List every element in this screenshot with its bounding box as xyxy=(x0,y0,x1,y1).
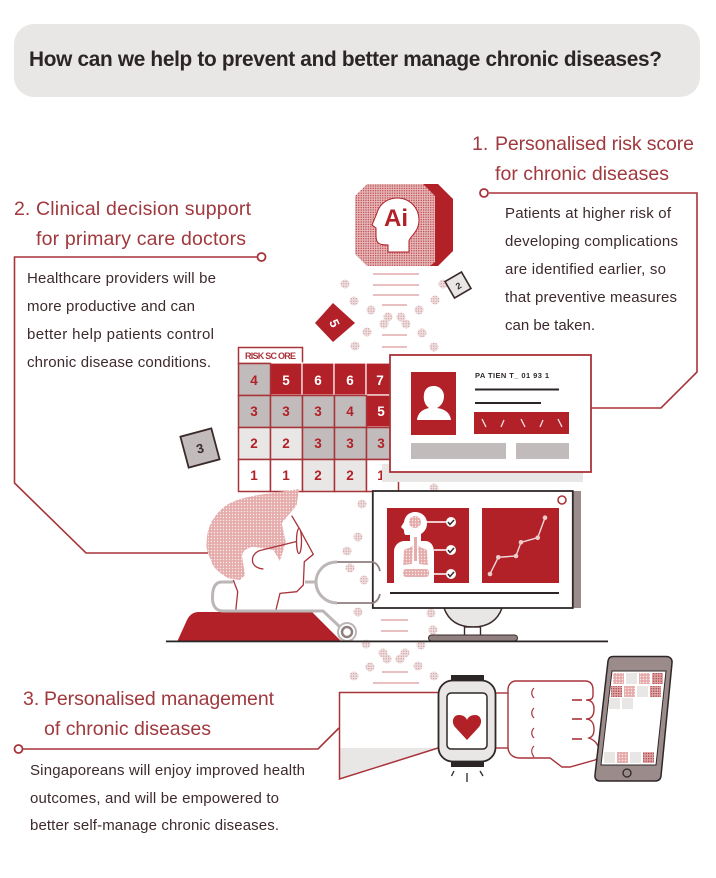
monitor stand xyxy=(428,608,518,641)
section 2: clinical decision support: more productive and can xyxy=(27,298,195,315)
section 1: personalised risk score: are identified earlier, so xyxy=(505,261,666,278)
section 3: personalised management: Personalised management xyxy=(44,688,275,710)
section 1: personalised risk score: 1. xyxy=(472,133,488,155)
section 1: personalised risk score: for chronic diseases xyxy=(495,163,669,185)
risk score table: 2 xyxy=(346,468,354,483)
title banner xyxy=(14,24,700,97)
icon: grey tile 3 xyxy=(180,428,220,468)
doctor with stethoscope xyxy=(177,489,380,642)
section 2: clinical decision support: Clinical decision support xyxy=(36,198,252,220)
section 1: personalised risk score: that preventive measures xyxy=(505,289,677,306)
patient photo xyxy=(411,372,456,435)
risk score table: 5 xyxy=(282,373,290,388)
risk score table: 2 xyxy=(250,436,258,451)
section 1: personalised risk score: can be taken. xyxy=(505,317,595,334)
risk score table: 1 xyxy=(250,468,258,483)
section 1: personalised risk score: Personalised risk score xyxy=(495,133,694,155)
section 1: personalised risk score: Patients at higher risk of xyxy=(505,205,672,222)
doctor hair xyxy=(206,489,299,580)
hand xyxy=(496,681,600,767)
risk score table: 3 xyxy=(314,404,322,419)
table tab: risk score: RISK SC ORE xyxy=(245,351,296,361)
patient record card: PA TIEN T_ 01 93 1 xyxy=(475,371,549,380)
icon: red diamond 5 xyxy=(315,303,355,342)
risk score table: 6 xyxy=(314,373,322,388)
risk score table: 3 xyxy=(282,404,290,419)
section 1: personalised risk score xyxy=(472,133,694,334)
risk score table xyxy=(238,348,398,492)
screen panel: line chart xyxy=(482,508,559,583)
section 1: personalised risk score: developing complications xyxy=(505,233,678,250)
connector: section 3 to wrist xyxy=(14,728,339,753)
icon: small tile 2 xyxy=(445,272,471,298)
monitor xyxy=(373,491,581,641)
risk score table: 2 xyxy=(282,436,290,451)
section 3: personalised management xyxy=(23,688,305,834)
title banner: How can we help to prevent and better manage chronic diseases? xyxy=(29,48,662,71)
risk score table: 1 xyxy=(377,468,385,483)
smartwatch xyxy=(438,675,496,782)
section 2: clinical decision support: Healthcare providers will be xyxy=(27,270,216,287)
risk score table: 4 xyxy=(346,404,354,419)
risk score table: 7 xyxy=(376,373,384,388)
section 3: personalised management: outcomes, and will be empowered to xyxy=(30,790,279,807)
doctor face outline xyxy=(233,516,313,611)
icon: small tile 2: 2 xyxy=(454,280,463,291)
patient data band xyxy=(474,412,569,434)
ground line xyxy=(166,640,608,642)
section 3: personalised management: better self-manage chronic diseases. xyxy=(30,817,279,834)
screen panel: body scan xyxy=(387,508,469,583)
stethoscope xyxy=(212,562,380,641)
section 2: clinical decision support: for primary care doctors xyxy=(36,228,246,250)
icon: grey tile 3: 3 xyxy=(195,440,206,457)
section 2: clinical decision support: chronic disease conditions. xyxy=(27,354,211,371)
doctor body xyxy=(177,612,342,642)
connector: section 2 to doctor xyxy=(14,253,266,553)
risk score table: 6 xyxy=(346,373,354,388)
risk score table: 3 xyxy=(314,436,322,451)
section 2: clinical decision support xyxy=(14,198,252,371)
risk score table: 4 xyxy=(250,373,258,388)
forearm xyxy=(340,692,438,779)
section 3: personalised management: Singaporeans will enjoy improved health xyxy=(30,762,305,779)
risk score table: 1 xyxy=(282,468,290,483)
connector: section 1 to patient card xyxy=(480,189,697,408)
risk score table: 5 xyxy=(377,404,385,419)
wrist with smartwatch xyxy=(340,656,672,782)
section 3: personalised management: 3. xyxy=(23,688,39,710)
section 3: personalised management: of chronic diseases xyxy=(44,718,211,740)
risk score table: 3 xyxy=(377,436,385,451)
icon: AI chip: Ai xyxy=(384,205,408,232)
patient record card xyxy=(382,355,591,482)
section 2: clinical decision support: better help patients control xyxy=(27,326,214,343)
section 2: clinical decision support: 2. xyxy=(14,198,30,220)
table tab: risk score xyxy=(238,348,302,364)
risk score table: 3 xyxy=(346,436,354,451)
smartphone xyxy=(595,656,672,781)
risk score table: 2 xyxy=(314,468,322,483)
icon: AI chip xyxy=(355,184,453,266)
icon: red diamond 5: 5 xyxy=(326,317,343,330)
data particles and lines xyxy=(340,274,448,683)
risk score table: 3 xyxy=(250,404,258,419)
